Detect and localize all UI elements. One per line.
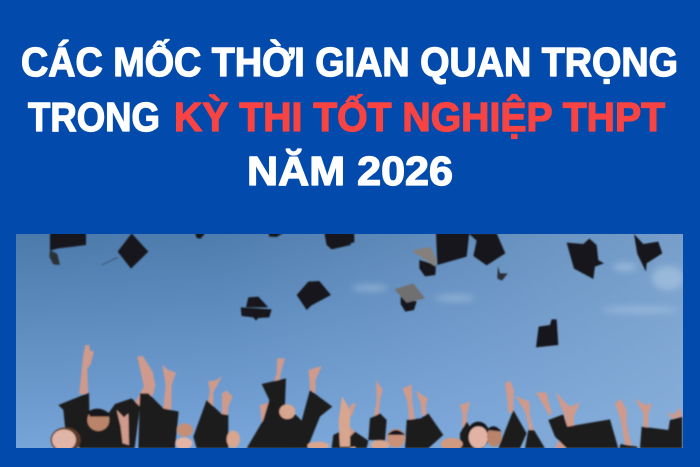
raised arms and hands	[350, 380, 682, 448]
flying caps, right half	[350, 233, 662, 347]
faces	[51, 396, 350, 453]
robes	[350, 410, 682, 448]
arm over robe	[117, 410, 129, 445]
raised arms and hands	[78, 344, 322, 424]
graduates, right half	[350, 380, 682, 450]
robes	[58, 378, 351, 448]
clouds	[352, 263, 684, 313]
title line 2: red highlight: KỲ THI TỐT NGHIỆP THPT	[174, 94, 665, 140]
title line 3: NĂM 2026	[247, 148, 453, 194]
title line 2: white part: TRONG	[28, 94, 160, 140]
photo: graduates throwing caps	[16, 233, 684, 453]
faces	[350, 422, 502, 450]
title	[21, 39, 678, 194]
sky	[16, 234, 683, 448]
flying caps, left half	[49, 233, 351, 321]
graduates, left half	[51, 345, 351, 453]
